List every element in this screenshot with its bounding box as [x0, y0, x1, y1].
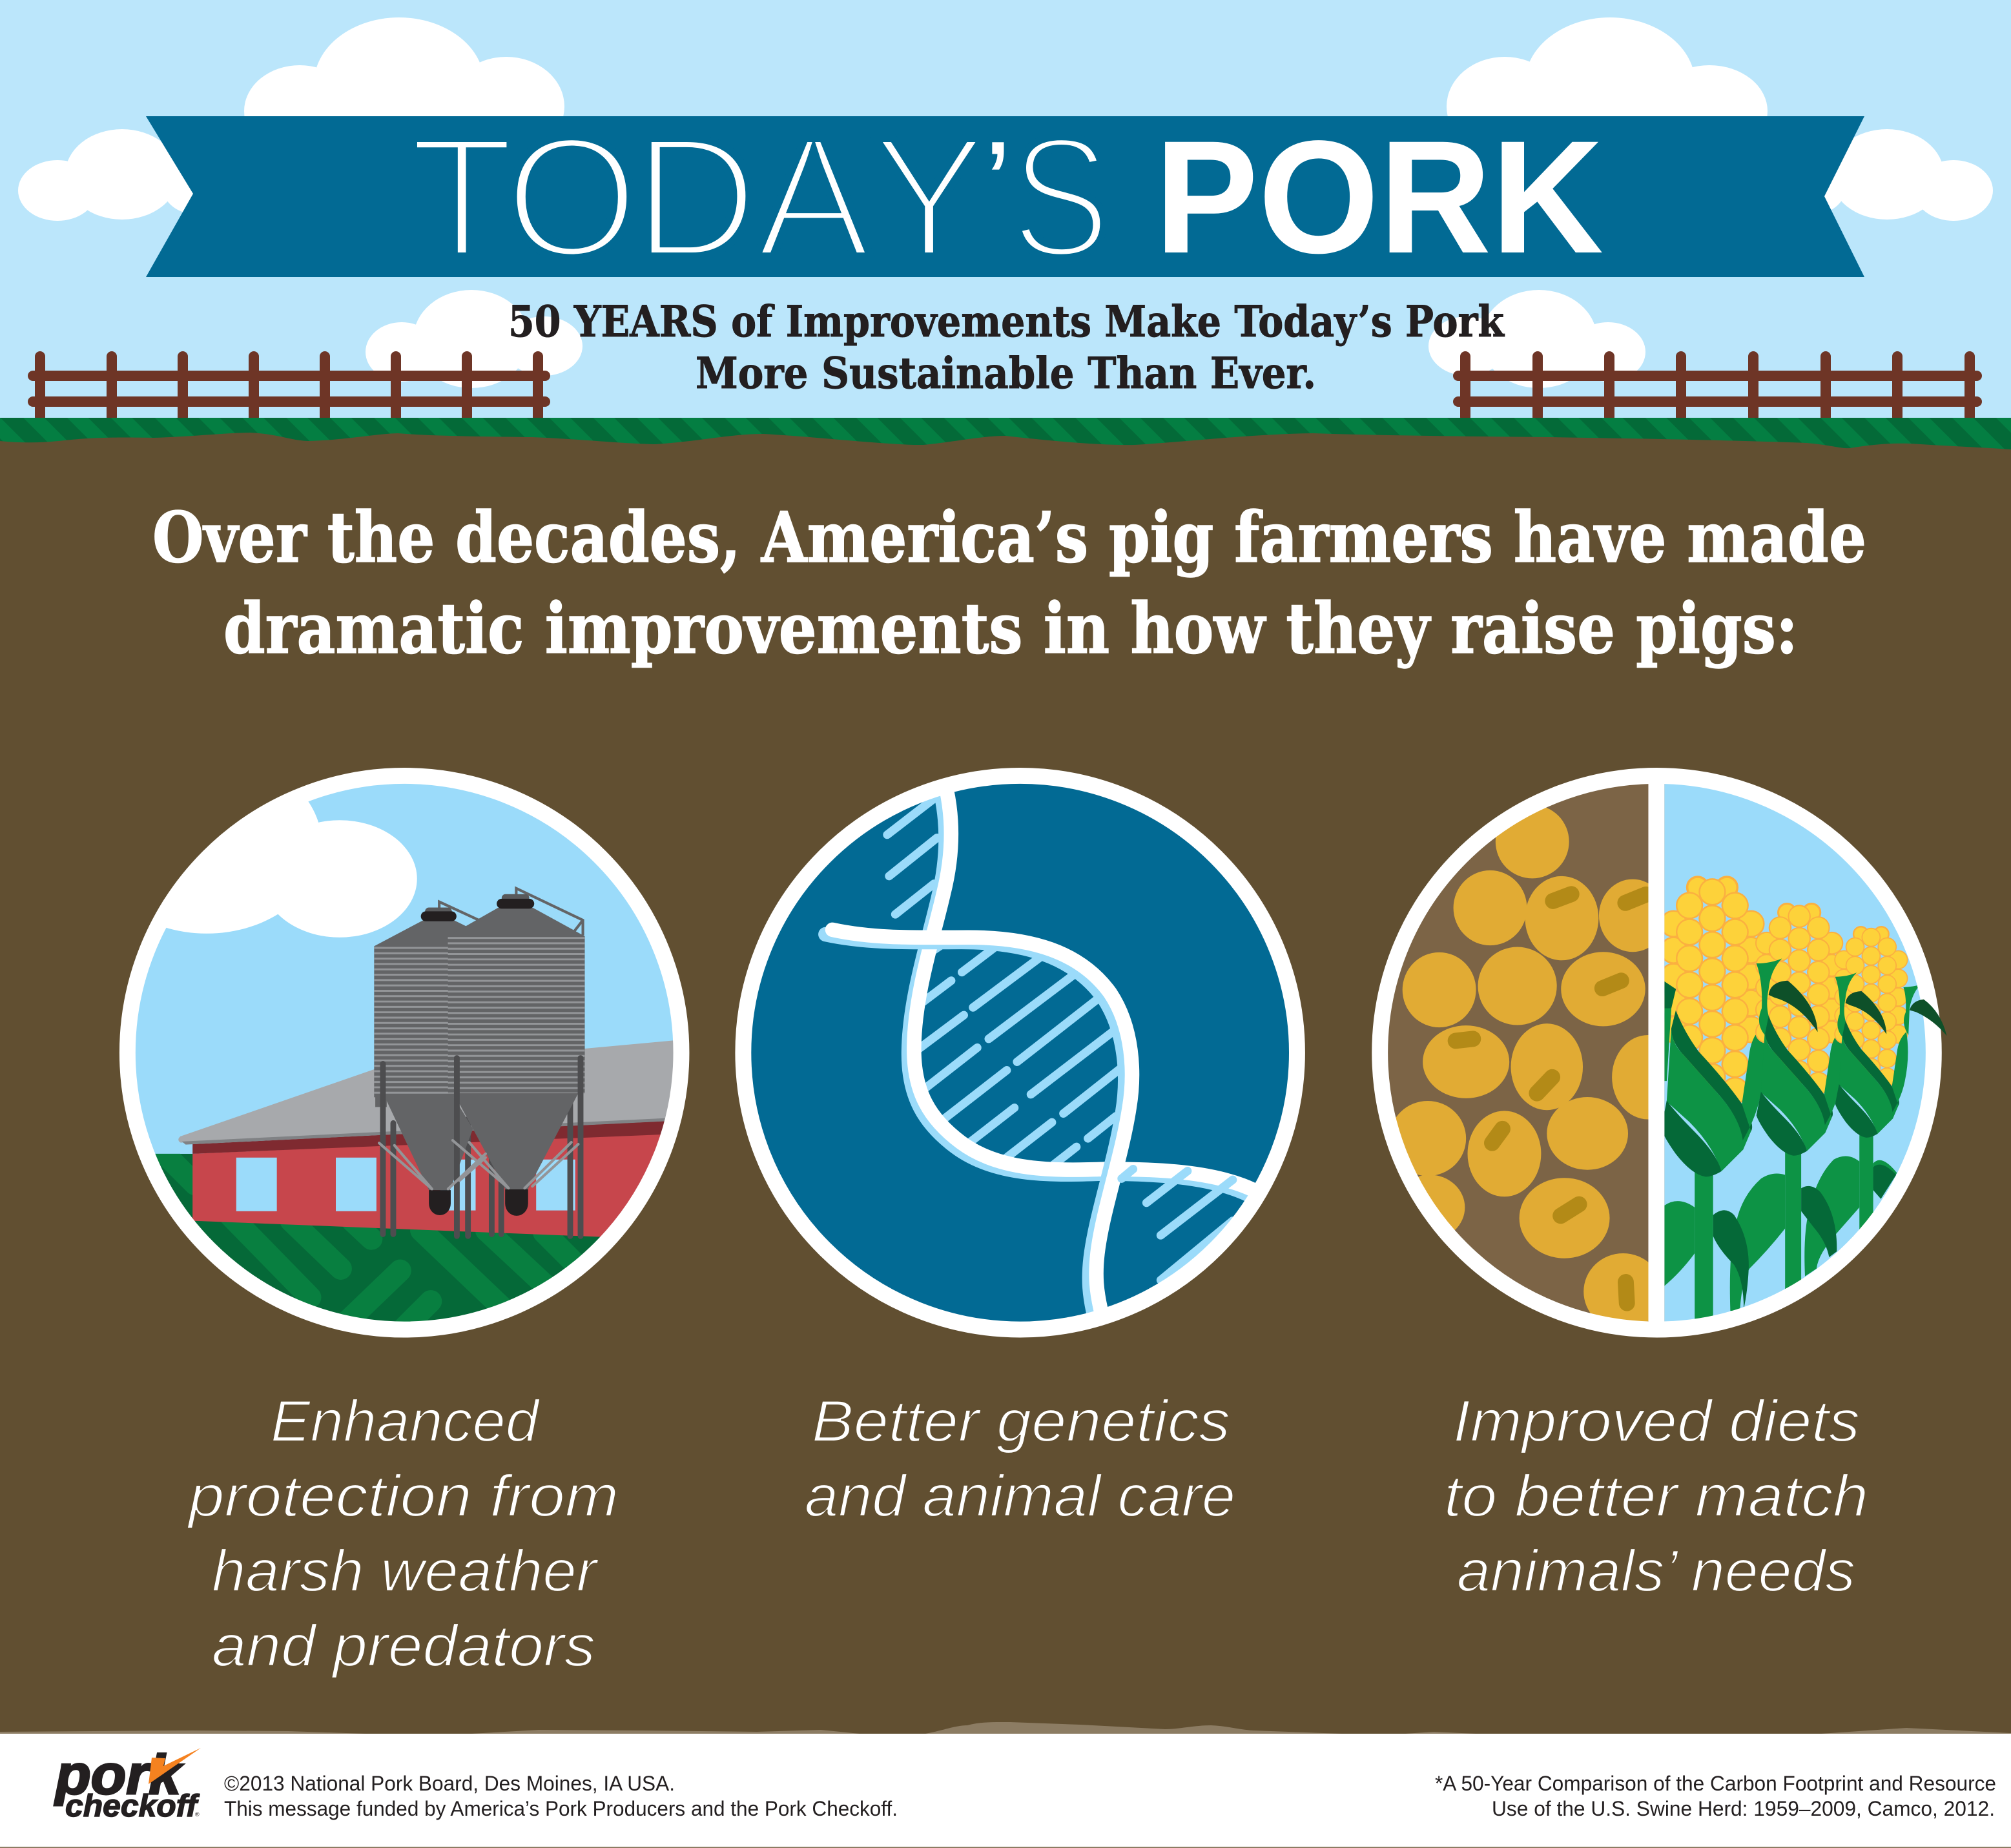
icon: grass field [155, 1153, 601, 1322]
icon: DNA strands [825, 790, 1253, 1313]
icon: corn plants [1661, 877, 1921, 1324]
icon: soybeans [1388, 784, 1648, 1321]
caption: genetics [805, 1389, 1235, 1529]
caption: protection: Enhanced [271, 1389, 541, 1454]
subtitle [508, 296, 1505, 398]
caption: diets: to better match [1444, 1464, 1868, 1529]
icon: corn ear back [1835, 927, 1908, 1138]
cloud: lower left [366, 290, 583, 388]
footer text: copyright: This message funded by America’s Pork Producers and the Pork Checkoff. [224, 1797, 898, 1820]
footer text: copyright: ©2013 National Pork Board, Des Moines, IA USA. [224, 1772, 675, 1795]
fence: left [28, 351, 550, 422]
heading: dramatic improvements in how they raise pigs: [223, 588, 1798, 670]
caption: genetics: and animal care [805, 1464, 1235, 1529]
cloud: top right [1447, 17, 1768, 157]
icon: corn ear middle [1757, 904, 1843, 1156]
caption: diets: animals’ needs [1457, 1539, 1855, 1604]
footer text: source note [1435, 1772, 1996, 1820]
cloud: lower right [1428, 290, 1645, 388]
logo: pork checkoff: checkoff [65, 1789, 200, 1823]
cloud: middle right [1785, 129, 1993, 221]
caption: protection: harsh weather [212, 1539, 599, 1604]
caption: protection [187, 1389, 619, 1679]
subtitle: More Sustainable Than Ever. [696, 348, 1316, 398]
icon: grain silos [374, 888, 585, 1236]
icon: cloud [167, 801, 417, 938]
logo: pork checkoff: pork [54, 1744, 183, 1806]
grass strip [0, 418, 2011, 457]
sky background [0, 0, 2011, 426]
heading [152, 497, 1866, 670]
title text: S [1011, 101, 1110, 293]
footer text: source note: *A 50-Year Comparison of the Carbon Footprint and Resource [1435, 1772, 1996, 1795]
footer hills [0, 1722, 2011, 1734]
caption: diets: Improved diets [1453, 1389, 1860, 1454]
footer text: copyright [224, 1772, 898, 1820]
panel: soybeans and corn circle [1374, 767, 1955, 1341]
footer text: source note: Use of the U.S. Swine Herd: 1959–2009, Camco, 2012. [1492, 1797, 1995, 1820]
title banner [146, 101, 1864, 293]
logo: pork checkoff [54, 1744, 201, 1823]
icon: DNA rungs [887, 796, 1233, 1280]
caption: protection: protection from [187, 1464, 619, 1529]
title text [409, 101, 1604, 293]
caption: genetics: Better genetics [812, 1389, 1230, 1454]
logo: pork checkoff: ® [195, 1811, 200, 1818]
brown soil background [0, 433, 2011, 1743]
footer panel [0, 1734, 2011, 1848]
panel: DNA circle [735, 767, 1309, 1341]
cloud: top left [244, 17, 564, 157]
title text: PORK [1155, 107, 1604, 287]
caption: diets [1444, 1389, 1868, 1604]
panel: barn and silos circle [92, 754, 693, 1345]
caption: protection: and predators [212, 1614, 595, 1679]
fence: right [1453, 351, 1982, 422]
icon: corn ear front [1661, 877, 1765, 1176]
icon: corn leaf tip [1910, 1000, 1946, 1036]
title text: TODAY [409, 101, 986, 293]
title text: ’ [984, 116, 1011, 253]
icon: barn [178, 1040, 678, 1240]
cloud: middle left [18, 129, 226, 221]
subtitle: 50 YEARS of Improvements Make Today’s Pork [508, 296, 1505, 347]
